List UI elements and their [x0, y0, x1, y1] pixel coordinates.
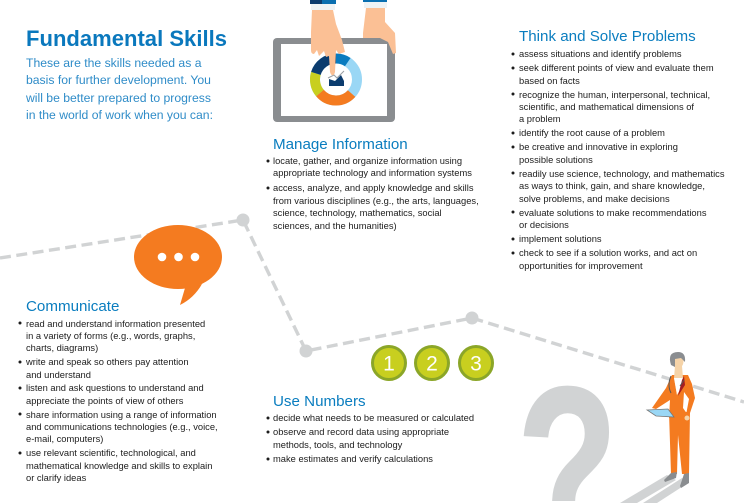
text: Manage Information bullets: from various disciplines (e.g., the arts, languages, — [273, 196, 479, 206]
text: Think and Solve Problems bullets: check to see if a solution works, and act on — [519, 248, 697, 258]
right hand — [363, 8, 396, 54]
stethoscope — [669, 376, 684, 393]
text: Use Numbers bullets: make estimates and verify calculations — [273, 454, 433, 464]
shadow — [620, 475, 688, 503]
text: Think and Solve Problems bullets: opportunities for improvement — [519, 261, 643, 271]
jacket — [652, 375, 695, 418]
icon: numbered circles 1 2 3 — [372, 346, 492, 380]
text: Think and Solve Problems bullets: seek different points of view and evaluate them — [519, 63, 714, 73]
intro text: These are the skills needed as a — [26, 56, 202, 70]
text: Think and Solve Problems bullets: be creative and innovative in exploring — [519, 142, 678, 152]
heading: Use Numbers: Use Numbers — [273, 393, 366, 410]
text: Think and Solve Problems bullets: based on facts — [519, 76, 580, 86]
head and hair — [672, 354, 684, 368]
text: Communicate bullets: or clarify ideas — [26, 473, 87, 483]
legs — [669, 412, 690, 474]
icon: orange speech bubble — [134, 225, 222, 305]
text: Think and Solve Problems bullets: identify the root cause of a problem — [519, 128, 665, 138]
tablet — [647, 409, 674, 417]
icon: numbered circles 1 2 3: 1 — [383, 352, 395, 376]
text: Think and Solve Problems bullets: assess situations and identify problems — [519, 49, 682, 59]
text: Think and Solve Problems bullets — [512, 49, 725, 271]
text: Communicate bullets: appreciate the points of view of others — [26, 396, 184, 406]
text: Communicate bullets: use relevant scientific, technological, and — [26, 448, 196, 458]
text: Manage Information bullets: access, analyze, and apply knowledge and skills — [273, 183, 474, 193]
intro text — [25, 56, 213, 122]
text: Think and Solve Problems bullets: as ways to think, gain, and share knowledge, — [519, 181, 705, 191]
left hand — [311, 10, 345, 75]
hand — [684, 416, 690, 420]
intro text: will be better prepared to progress — [25, 91, 211, 105]
text: Think and Solve Problems bullets: a problem — [519, 114, 561, 124]
text: Communicate bullets: write and speak so others pay attention — [25, 357, 189, 367]
text: Communicate bullets: mathematical knowledge and skills to explain — [26, 461, 212, 471]
dashed path connecting skills — [0, 214, 744, 402]
figure: woman in orange suit with tablet — [620, 352, 695, 503]
text: Communicate bullets: listen and ask questions to understand and — [26, 383, 204, 393]
shoes — [664, 472, 677, 482]
text: Think and Solve Problems bullets: solve problems, and make decisions — [519, 194, 670, 204]
text: Think and Solve Problems bullets: possible solutions — [519, 155, 593, 165]
heading: Communicate: Communicate — [26, 298, 119, 315]
intro text: basis for further development. You — [26, 73, 211, 87]
text: Communicate bullets: and understand — [26, 370, 91, 380]
heading: Manage Information: Manage Information — [273, 136, 408, 153]
text: Manage Information bullets: locate, gather, and organize information using — [273, 156, 462, 166]
text: Use Numbers bullets: methods, tools, and technology — [273, 440, 403, 450]
title: Fundamental Skills — [26, 26, 227, 51]
text: Communicate bullets: read and understand information presented — [26, 319, 205, 329]
text: Use Numbers bullets: decide what needs to be measured or calculated — [273, 413, 474, 423]
text: Think and Solve Problems bullets: recognize the human, interpersonal, technical, — [519, 90, 710, 100]
text: Think and Solve Problems bullets: or decisions — [519, 220, 569, 230]
left cuff — [310, 0, 336, 4]
text: Think and Solve Problems bullets: readily use science, technology, and mathematics — [519, 169, 725, 179]
text: Communicate bullets: in a variety of forms (e.g., words, graphs, — [26, 331, 195, 341]
icon: tablet with hands and donut chart — [273, 0, 396, 122]
right cuff — [363, 0, 387, 2]
text: Communicate bullets: e-mail, computers) — [26, 434, 103, 444]
donut chart — [315, 58, 357, 100]
text: Think and Solve Problems bullets: evaluate solutions to make recommendations — [519, 208, 707, 218]
text: Communicate bullets — [18, 319, 218, 483]
heading: Think and Solve Problems: Think and Solve Problems — [519, 28, 696, 45]
icon: numbered circles 1 2 3: 3 — [470, 352, 482, 376]
text: Manage Information bullets: sciences, and the humanities) — [273, 221, 397, 231]
intro text: in the world of work when you can: — [26, 108, 213, 122]
text: Use Numbers bullets: observe and record data using appropriate — [273, 427, 449, 437]
text: Think and Solve Problems bullets: implement solutions — [519, 234, 602, 244]
chart glyph — [329, 75, 344, 86]
text: Communicate bullets: and communications technologies (e.g., voice, — [26, 422, 218, 432]
text: Communicate bullets: charts, diagrams) — [26, 343, 98, 353]
text: Use Numbers bullets — [266, 413, 474, 464]
icon: numbered circles 1 2 3: 2 — [426, 352, 438, 376]
text: Manage Information bullets — [266, 156, 479, 231]
text: Think and Solve Problems bullets: scientific, and mathematical dimensions of — [519, 102, 694, 112]
text: Communicate bullets: share information using a range of information — [26, 410, 217, 420]
text: Manage Information bullets: science, technology, mathematics, social — [273, 208, 442, 218]
tablet frame — [273, 38, 395, 122]
neck and shirt — [674, 366, 683, 395]
text: Manage Information bullets: appropriate technology and information systems — [273, 168, 472, 178]
